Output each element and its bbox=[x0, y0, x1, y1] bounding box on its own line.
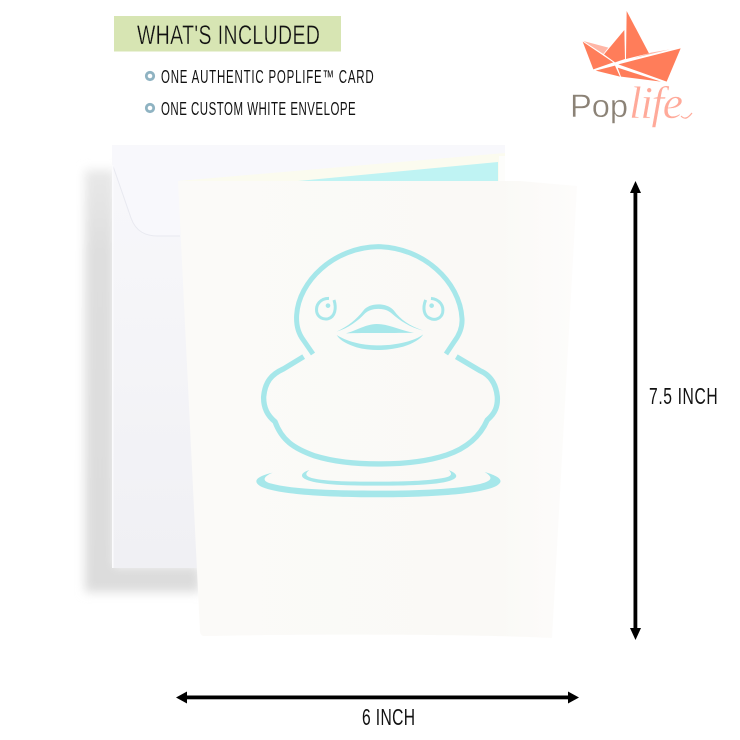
heading: what's included: WHAT'S INCLUDED bbox=[137, 20, 320, 50]
label: 7.5 inch: 7.5 INCH bbox=[649, 384, 718, 410]
duck upper bill bbox=[337, 304, 423, 332]
logo word: life: life bbox=[629, 77, 683, 128]
duck head bbox=[297, 247, 462, 354]
arrow: height dimension bbox=[630, 181, 641, 640]
inner card cyan page bbox=[298, 162, 498, 182]
inner ripple bbox=[302, 470, 456, 486]
logo word: pop: Pop bbox=[570, 88, 628, 124]
card front bbox=[178, 181, 577, 638]
label: 6 inch: 6 INCH bbox=[362, 705, 415, 731]
duck lip bbox=[346, 324, 414, 333]
envelope flap bbox=[112, 146, 505, 236]
outer ripple bbox=[256, 472, 501, 497]
heading: what's included bbox=[114, 16, 341, 52]
duck body bbox=[264, 357, 497, 464]
included items list bbox=[146, 67, 374, 120]
duck left eye bbox=[317, 298, 335, 319]
duck cutout bbox=[256, 247, 501, 497]
bullet item: envelope: ONE CUSTOM WHITE ENVELOPE bbox=[161, 99, 356, 120]
inner card bbox=[178, 153, 505, 182]
duck lower bill bbox=[337, 334, 423, 350]
bullet item: card: ONE AUTHENTIC POPLIFE™ CARD bbox=[161, 67, 374, 88]
arrow: width dimension bbox=[176, 692, 579, 704]
icon: origami boat bbox=[583, 11, 681, 82]
envelope bbox=[112, 145, 505, 568]
logo swash bbox=[681, 113, 692, 118]
logo: poplife bbox=[570, 11, 692, 128]
duck right eye bbox=[424, 298, 443, 319]
envelope shadow bbox=[85, 170, 200, 592]
